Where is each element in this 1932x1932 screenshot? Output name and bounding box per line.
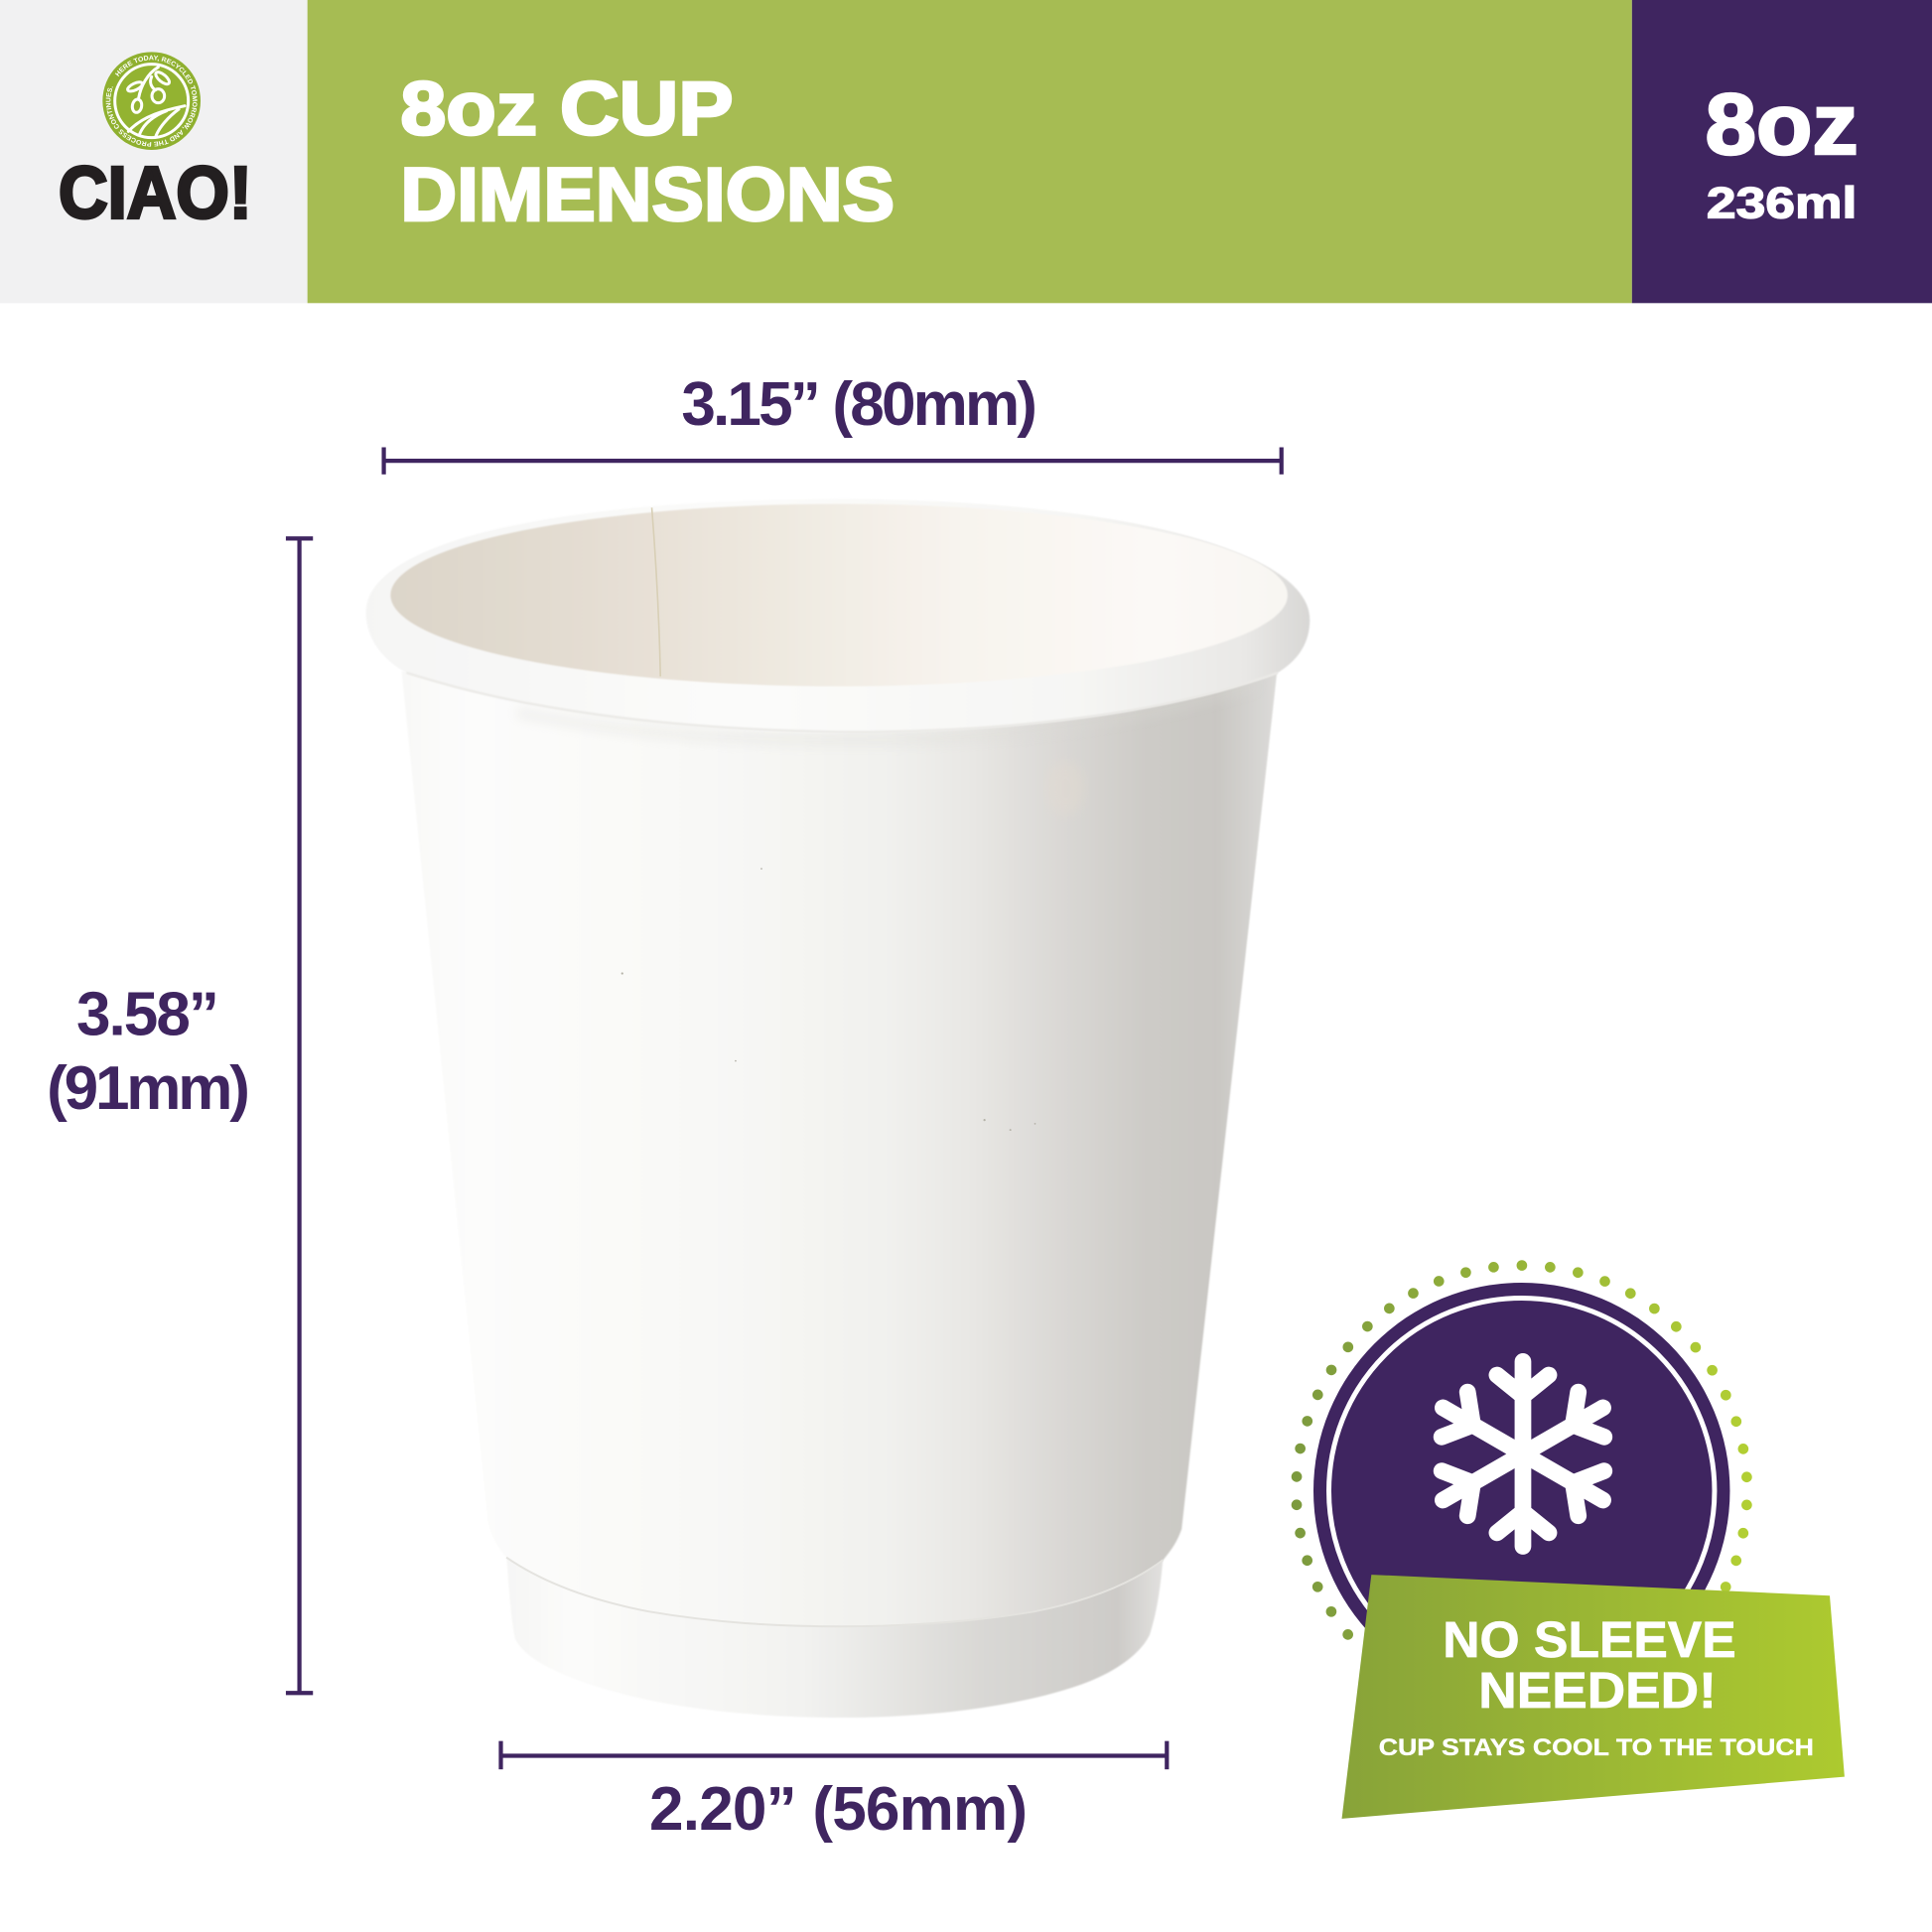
badge purple circle bbox=[1313, 1283, 1729, 1699]
dimension: height label bbox=[47, 980, 250, 1123]
banner headline: NO SLEEVE bbox=[1443, 1611, 1736, 1668]
cup interior bbox=[390, 504, 1288, 686]
title bbox=[400, 67, 895, 237]
cup body bbox=[402, 665, 1278, 1626]
banner subline: CUP STAYS COOL TO THE TOUCH bbox=[1379, 1734, 1814, 1761]
title: 8oz CUP bbox=[400, 67, 733, 151]
cup groove line bbox=[506, 1558, 1164, 1626]
body specks bbox=[621, 868, 1035, 1131]
dimension: base width line bbox=[500, 1741, 1167, 1769]
badge inner white ring bbox=[1328, 1298, 1715, 1684]
warm mark on body bbox=[1046, 761, 1085, 816]
banner headline bbox=[1443, 1611, 1736, 1719]
badge green banner bbox=[1342, 1575, 1845, 1819]
cup rim bbox=[366, 499, 1310, 733]
cup base bbox=[506, 1555, 1164, 1718]
capacity label: 236ml bbox=[1707, 180, 1857, 228]
header: purple capacity panel background bbox=[1632, 0, 1932, 303]
header: logo panel background bbox=[0, 0, 308, 303]
capacity label bbox=[1706, 76, 1859, 228]
dimension: base width label: 2.20” (56mm) bbox=[649, 1775, 1028, 1844]
banner headline: NEEDED! bbox=[1478, 1662, 1717, 1719]
cup paper seam bbox=[652, 507, 660, 676]
logo: recycled emblem: HERE TODAY, RECYCLED TOMORROW, AND THE PROCESS CONTINUES. bbox=[105, 56, 198, 147]
dimension: height label: (91mm) bbox=[47, 1054, 250, 1123]
logo wordmark: CIAO! bbox=[59, 152, 252, 234]
dimension: top width line bbox=[384, 448, 1282, 475]
dimension: height line bbox=[286, 538, 313, 1693]
rim lower shading bbox=[407, 673, 1278, 732]
title: DIMENSIONS bbox=[400, 153, 895, 237]
badge dotted ring bbox=[1297, 1266, 1747, 1717]
badge: no sleeve needed bbox=[1297, 1266, 1845, 1819]
header: green title panel background bbox=[308, 0, 1632, 303]
icon: snowflake bbox=[1430, 1361, 1616, 1547]
cup photo illustration bbox=[366, 499, 1310, 1718]
dimension: top width label: 3.15” (80mm) bbox=[681, 370, 1037, 439]
dimension: height label: 3.58” bbox=[76, 980, 219, 1048]
capacity label: 8oz bbox=[1706, 76, 1859, 173]
under-rim shadow bbox=[517, 685, 1257, 740]
